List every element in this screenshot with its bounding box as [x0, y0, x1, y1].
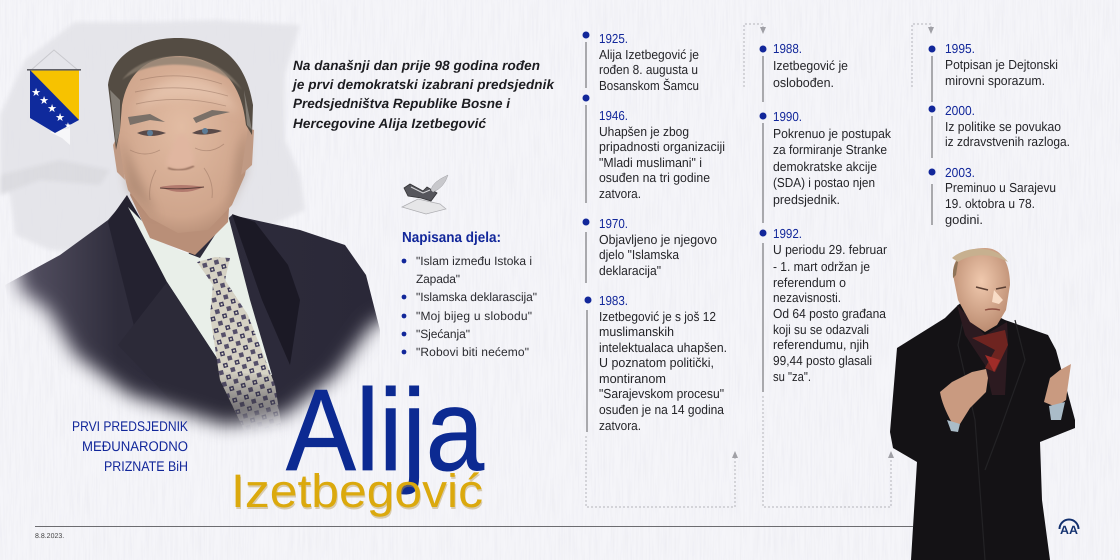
entry 1992: U periodu 29. februar [773, 242, 888, 257]
subtitle: first president: MEĐUNARODNO [82, 438, 188, 454]
subtitle: first president: PRVI PREDSJEDNIK [72, 418, 189, 434]
portrait hair [108, 38, 253, 150]
icon: Bosnian pennant flag: ★ [47, 102, 57, 115]
timeline dots [582, 32, 592, 304]
entry 1983 [599, 293, 727, 433]
entry 1946: Uhapšen je zbog [599, 124, 689, 139]
entry 2003 [945, 165, 1056, 227]
entry 1992: koji su se odazvali [773, 322, 869, 337]
timeline rails [762, 56, 764, 392]
portrait suit and shirt [5, 195, 380, 450]
entry 1970: Objavljeno je njegovo [599, 232, 717, 247]
entry 1983: osuđen je na 14 godina [599, 402, 725, 417]
icon: Bosnian pennant flag [27, 50, 81, 145]
portrait eyebrows [128, 110, 230, 125]
entry 1990: (SDA) i postao njen [773, 175, 875, 190]
entry 1990: za formiranje Stranke [773, 142, 887, 157]
entry 1988 [773, 41, 848, 90]
entry 1983: 1983. [599, 293, 628, 308]
entry 1990: predsjednik. [773, 192, 840, 207]
timeline rails [931, 56, 933, 225]
footer line [35, 526, 913, 528]
entry 1990 [773, 109, 891, 207]
icon: Bosnian pennant flag: ★ [55, 111, 65, 124]
entry 1995: mirovni sporazum. [945, 73, 1045, 88]
entry 1970: 1970. [599, 216, 628, 231]
title: name [231, 365, 484, 519]
subtitle: first president [72, 418, 189, 474]
intro text [291, 58, 555, 131]
entry 1990: Pokrenuo je postupak [773, 126, 891, 141]
entry 2000: Iz politike se povukao [945, 119, 1061, 134]
works list: "Robovi biti nećemo" [416, 345, 529, 359]
timeline dots [928, 46, 936, 176]
entry 1992 [773, 226, 888, 384]
entry 1925: rođen 8. augusta u [599, 62, 698, 77]
entry 1946: "Mladi muslimani" i [599, 155, 702, 170]
entry 2003: 2003. [945, 165, 975, 180]
portrait face [116, 50, 252, 233]
entry 1995: Potpisan je Dejtonski [945, 57, 1058, 72]
figure coat [890, 300, 1075, 560]
timeline column 3 [928, 41, 1070, 227]
intro text: Predsjedništva Republike Bosne i [293, 96, 510, 111]
entry 1990: 1990. [773, 109, 802, 124]
entry 1925: Bosanskom Šamcu [599, 78, 699, 93]
entry 2003: Preminuo u Sarajevu [945, 180, 1056, 195]
entry 1995 [945, 41, 1058, 88]
entry 1925: Alija Izetbegović je [599, 47, 699, 62]
icon: AA logo: AA [1060, 523, 1078, 537]
entry 1970: deklaracija" [599, 263, 661, 278]
figure scarf [957, 305, 1008, 395]
entry 1946: 1946. [599, 108, 628, 123]
timeline column 1 [582, 31, 727, 433]
works list: "Islam između Istoka i [416, 254, 532, 268]
entry 1990: demokratske akcije [773, 159, 877, 174]
intro text: Na današnji dan prije 98 godina rođen [293, 58, 540, 73]
works list: "Sjećanja" [416, 327, 470, 341]
works bullets [402, 259, 406, 354]
entry 1988: oslobođen. [773, 75, 834, 90]
portrait nose [166, 135, 194, 170]
entry 1983: intelektualaca uhapšen. [599, 340, 727, 355]
entry 1992: 1992. [773, 226, 802, 241]
works list: Zapada" [416, 272, 460, 286]
arrow: column 1 return [586, 436, 738, 507]
figure cuffs [947, 402, 1065, 432]
portrait: Alija Izetbegović [5, 38, 380, 450]
works list: "Moj bijeg u slobodu" [416, 309, 532, 323]
icon: Bosnian pennant flag: ★ [39, 94, 49, 107]
entry 2003: 19. oktobra u 78. [945, 196, 1035, 211]
arrow: column 3 entry [912, 24, 934, 87]
entry 2000: iz zdravstvenih razloga. [945, 134, 1070, 149]
figure head [953, 248, 1010, 332]
date: 8.8.2023. [35, 533, 64, 540]
entry 1946: zatvora. [599, 186, 641, 201]
entry 2000: 2000. [945, 103, 975, 118]
entry 1988: 1988. [773, 41, 802, 56]
works list: "Islamska deklarascija" [416, 290, 537, 304]
entry 1992: Od 64 posto građana [773, 306, 887, 321]
title: name: Izetbegović [231, 464, 483, 517]
entry 1983: "Sarajevskom procesu" [599, 386, 724, 401]
works heading: Napisana djela: [402, 230, 501, 246]
timeline dots [760, 46, 766, 236]
icon: Bosnian pennant flag: ★ [64, 121, 72, 130]
entry 1983: U poznatom politički, [599, 355, 714, 370]
entry 1925 [599, 31, 699, 93]
entry 1925: 1925. [599, 31, 628, 46]
timeline column 2 [760, 41, 891, 392]
entry 1970 [599, 216, 717, 278]
arrow: column 2 return [763, 396, 894, 507]
entry 2003: godini. [945, 212, 983, 227]
entry 1992: nezavisnosti. [773, 290, 841, 305]
entry 1983: Izetbegović je s još 12 [599, 309, 716, 324]
portrait tie [197, 257, 282, 432]
title: name: Alija [286, 365, 484, 495]
entry 1992: referendum o [773, 275, 846, 290]
entry 1946: pripadnosti organizaciji [599, 139, 725, 154]
portrait eyes [137, 129, 222, 136]
entry 1992: 99,44 posto glasali [773, 353, 872, 368]
arrow: column 2 entry [744, 24, 766, 87]
entry 1992: referendumu, njih [773, 337, 869, 352]
icon: Bosnian pennant flag: ★ [31, 86, 41, 99]
entry 1988: Izetbegović je [773, 58, 848, 73]
panel: written works [402, 230, 537, 359]
portrait mouth [160, 185, 204, 192]
portrait neck [130, 170, 232, 255]
entry 1983: montiranom [599, 371, 666, 386]
portrait wrinkles [130, 76, 228, 200]
entry 1946: osuđen na tri godine [599, 170, 710, 185]
watercolor map behind portrait [0, 20, 305, 255]
entry 1992: - 1. mart održan je [773, 259, 870, 274]
works list [416, 254, 537, 359]
entry 1983: zatvora. [599, 418, 641, 433]
intro text: Hercegovine Alija Izetbegović [293, 116, 486, 131]
entry 1983: muslimanskih [599, 324, 674, 339]
entry 1946 [599, 108, 725, 201]
entry 1995: 1995. [945, 41, 975, 56]
entry 2000 [945, 103, 1070, 149]
timeline rails [586, 42, 587, 432]
title: name: Izetbegović [232, 466, 484, 519]
entry 1992: su "za". [773, 369, 811, 384]
entry 1970: djelo "Islamska [599, 247, 680, 262]
subtitle: first president: PRIZNATE BiH [104, 458, 188, 474]
intro text: je prvi demokratski izabrani predsjednik [291, 77, 555, 92]
portrait ears [113, 128, 254, 180]
icon: book and feather [402, 175, 448, 214]
figure hands [940, 369, 988, 424]
photo: praying figure [890, 248, 1075, 560]
